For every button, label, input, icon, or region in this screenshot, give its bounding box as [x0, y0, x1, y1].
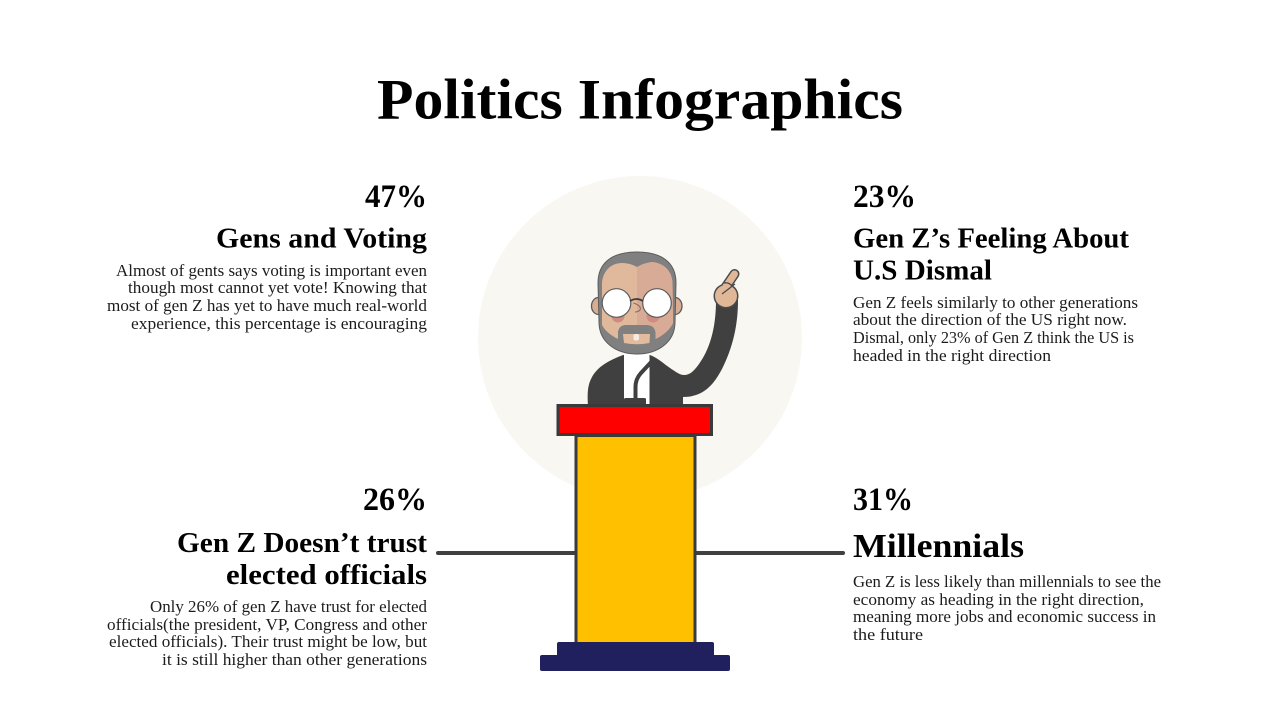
face [602, 262, 673, 339]
connector line: left [438, 551, 578, 555]
body text: gens and voting [107, 261, 428, 333]
body text: trust in officials: officials(the president, VP, Congress and other [107, 615, 428, 634]
body text: trust in officials: Only 26% of gen Z have trust for elected [150, 597, 428, 616]
heading: trust in officials [177, 527, 427, 591]
body text: millennials: Gen Z is less likely than millennials to see the [853, 572, 1161, 591]
stat: 47%: 47% [365, 179, 427, 215]
panel: feeling about us [853, 179, 1138, 365]
body text: feeling about us: headed in the right direction [853, 346, 1051, 365]
stat: 23%: 23% [853, 179, 916, 215]
heading: feeling about us: Gen Z’s Feeling About [853, 222, 1129, 254]
lectern body [576, 436, 695, 644]
hand [714, 274, 738, 308]
stat: 26%: 26% [363, 482, 427, 518]
background circle [478, 176, 802, 500]
shirt [624, 354, 650, 406]
body text: feeling about us: Dismal, only 23% of Gen Z think the US is [853, 328, 1134, 347]
heading: trust in officials: elected officials [226, 559, 427, 591]
body text: feeling about us: Gen Z feels similarly to other generations [853, 293, 1138, 312]
heading: gens and voting: Gens and Voting [216, 222, 428, 254]
heading: trust in officials: Gen Z Doesn’t trust [177, 527, 427, 559]
body text: millennials [853, 572, 1161, 644]
panel: gens and voting [107, 179, 428, 333]
body text: gens and voting: most of gen Z has yet to have much real-world [107, 296, 428, 315]
body text: millennials: the future [853, 625, 923, 644]
heading: feeling about us: U.S Dismal [853, 254, 992, 286]
body text: millennials: meaning more jobs and economic success in [853, 607, 1156, 626]
cheeks [612, 310, 660, 322]
panel: trust in officials [107, 482, 428, 669]
glasses [602, 289, 671, 317]
body text: trust in officials: elected officials). Their trust might be low, but [109, 632, 427, 651]
body text: trust in officials [107, 597, 428, 669]
connector line: right [694, 551, 843, 555]
body text: gens and voting: Almost of gents says voting is important even [116, 261, 427, 280]
face shading [637, 262, 673, 339]
head hair and beard [598, 252, 676, 354]
lectern base [540, 642, 730, 671]
heading: feeling about us [853, 222, 1129, 286]
microphone [624, 359, 654, 407]
ears [592, 298, 682, 314]
body text: feeling about us: about the direction of the US right now. [853, 310, 1127, 329]
body text: feeling about us [853, 293, 1138, 365]
mouth [623, 334, 650, 344]
title: Politics Infographics [377, 68, 903, 132]
jacket and raised arm [588, 300, 738, 406]
stat: 31%: 31% [853, 482, 913, 518]
lectern top [558, 406, 712, 434]
body text: millennials: economy as heading in the right direction, [853, 590, 1144, 609]
body text: trust in officials: it is still higher than other generations [162, 650, 427, 669]
panel: millennials [853, 482, 1161, 644]
body text: gens and voting: experience, this percentage is encouraging [131, 314, 427, 333]
icon: speaker [540, 252, 738, 671]
body text: gens and voting: though most cannot yet vote! Knowing that [128, 278, 427, 297]
heading: millennials: Millennials [853, 528, 1024, 565]
